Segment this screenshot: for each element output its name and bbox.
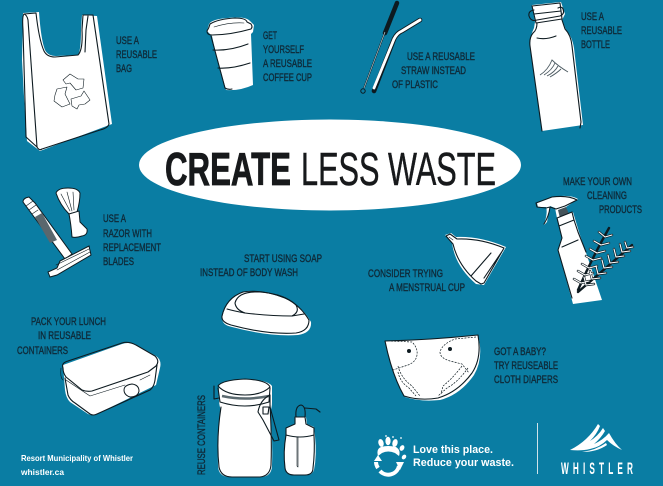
label: razor: BLADES [103, 256, 134, 268]
label: razor [103, 213, 161, 268]
icon: straw and cleaning brush [361, 3, 420, 93]
icon: water bottle [529, 2, 583, 131]
icon: reusable bag [22, 12, 112, 151]
label: lunch containers: CONTAINERS [17, 345, 68, 357]
label: straw [392, 51, 475, 91]
label: bottle [581, 11, 622, 51]
label: soap: START USING SOAP [244, 253, 322, 265]
label: straw: OF PLASTIC [392, 79, 438, 91]
label: bottle: REUSABLE [581, 25, 622, 37]
label: diaper: GOT A BABY? [494, 346, 546, 358]
icon: glass jars [214, 379, 320, 477]
logo text: love this place [413, 444, 514, 469]
footer: municipality credit: whistler.ca [20, 467, 64, 477]
label: coffee cup [263, 30, 312, 84]
icon: menstrual cup [445, 233, 506, 285]
label: diaper: TRY REUSEABLE [494, 360, 558, 372]
label: cleaning products: PRODUCTS [599, 204, 642, 216]
icon: razor and shaving brush [23, 188, 91, 277]
label: coffee cup: COFFEE CUP [263, 72, 312, 84]
icon: soap dish [222, 291, 311, 335]
label: lunch containers: PACK YOUR LUNCH [31, 316, 106, 328]
label: bottle: BOTTLE [581, 39, 610, 51]
label: coffee cup: A REUSABLE [263, 58, 312, 70]
label: bag: BAG [116, 63, 132, 75]
logo: paw with recycling arrows [374, 435, 407, 475]
label: straw: USE A REUSABLE [407, 51, 475, 63]
label: razor: USE A [103, 213, 126, 225]
icon: recycling arrows [54, 74, 90, 109]
logo text: love this place: Reduce your waste. [413, 457, 514, 469]
icon: mountain emblem [540, 60, 568, 77]
label: coffee cup: GET [263, 30, 277, 42]
label: coffee cup: YOURSELF [263, 44, 304, 56]
label: bag [116, 35, 157, 75]
icon: rosemary [574, 228, 633, 292]
title banner: CREATE [165, 143, 291, 195]
logo: Whistler [561, 424, 633, 478]
label: lunch containers [17, 316, 106, 357]
label: reuse containers: REUSE CONTAINERS [196, 395, 208, 475]
label: menstrual cup: A MENSTRUAL CUP [389, 282, 465, 294]
label: soap [200, 253, 322, 279]
label: cleaning products [563, 176, 642, 216]
icon: spray bottle with rosemary [536, 196, 633, 304]
label: menstrual cup [368, 268, 465, 294]
label: straw: STRAW INSTEAD [401, 65, 466, 77]
label: cleaning products: MAKE YOUR OWN [563, 176, 632, 188]
title banner [139, 120, 521, 210]
label: bag: REUSABLE [116, 49, 157, 61]
title banner: LESS WASTE [301, 143, 496, 195]
label: menstrual cup: CONSIDER TRYING [368, 268, 443, 280]
logo: Whistler: WHISTLER [561, 459, 633, 478]
label: razor: REPLACEMENT [103, 242, 161, 254]
label: lunch containers: IN REUSABLE [38, 330, 91, 342]
logo text: love this place: Love this place. [413, 444, 493, 456]
label: bottle: USE A [581, 11, 604, 23]
label: soap: INSTEAD OF BODY WASH [200, 267, 298, 279]
icon: cloth diaper [385, 335, 480, 401]
icon: coffee cup [207, 17, 254, 90]
footer: municipality credit: Resort Municipality of Whistler [21, 453, 134, 463]
label: diaper [494, 346, 558, 386]
label: diaper: CLOTH DIAPERS [494, 374, 558, 386]
label: razor: RAZOR WITH [103, 228, 152, 240]
footer: municipality credit [20, 453, 134, 477]
label: cleaning products: CLEANING [587, 190, 627, 202]
label: bag: USE A [116, 35, 139, 47]
icon: lunch box [61, 342, 160, 415]
